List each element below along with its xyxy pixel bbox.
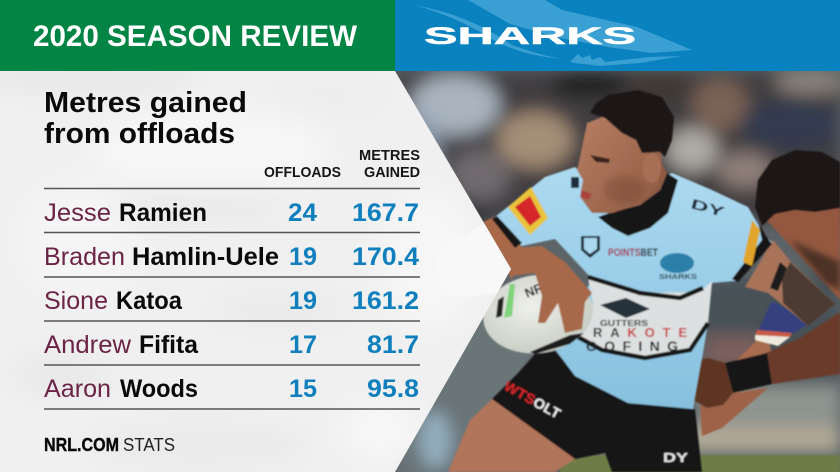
opponent beard <box>790 240 840 290</box>
ball logo <box>530 333 584 354</box>
opponent face <box>766 207 840 300</box>
Sharks player <box>448 90 835 472</box>
row: Jesse Ramien <box>44 199 419 227</box>
title: 2020 SEASON REVIEW <box>33 20 358 53</box>
row: Aaron Woods: 95.8 <box>367 375 419 403</box>
source logo: NRL.COM Stats <box>44 435 175 455</box>
sleeve white cuff <box>755 335 790 346</box>
table: column headers: OFFLOADS <box>264 164 341 181</box>
sleeve ghost <box>437 222 520 297</box>
white torso band <box>578 278 712 359</box>
row: Andrew Fifita <box>44 331 419 359</box>
row: Sione Katoa: Katoa <box>116 287 183 315</box>
row: Braden Hamlin-Uele: Hamlin-Uele <box>132 243 279 271</box>
blurred stadium and ground <box>395 278 840 472</box>
sponsor patch <box>508 187 548 235</box>
table: column headers <box>264 147 420 181</box>
row: Andrew Fifita: Fifita <box>139 331 199 359</box>
jersey text: Rakote: RA KOTE <box>593 325 687 340</box>
row: Sione Katoa: 19 <box>289 287 317 315</box>
black stripe lower <box>578 323 708 358</box>
wrist band <box>725 353 772 393</box>
shorts <box>492 351 702 472</box>
source logo: NRL.COM Stats: NRL.COM <box>44 435 119 455</box>
row: Jesse Ramien: Ramien <box>119 199 207 227</box>
mouth <box>581 190 592 200</box>
opponent sleeve <box>758 301 812 334</box>
ball NRL mark: NRL <box>523 277 553 301</box>
sleeve band <box>492 216 522 248</box>
shorts sponsor: WTSOLT <box>502 378 564 422</box>
blurred crowd <box>395 70 840 233</box>
source logo: NRL.COM Stats: STATS <box>123 435 175 455</box>
player arm <box>745 240 835 326</box>
jersey DY logo: DY <box>689 195 727 220</box>
ball stripe <box>504 284 515 318</box>
brow and eye <box>590 155 610 163</box>
ball dark marks <box>496 296 504 318</box>
row: Aaron Woods: 15 <box>289 375 317 403</box>
panel: stats background <box>0 68 520 472</box>
row: Braden Hamlin-Uele: Braden <box>44 243 125 271</box>
photo: Sharks player carrying the ball <box>395 70 840 472</box>
black stripe upper <box>588 277 703 298</box>
header: blue Sharks bar <box>395 0 840 71</box>
jersey NRL badge <box>581 236 600 258</box>
raised arm skin <box>483 217 522 280</box>
heading: Metres gained <box>44 87 247 119</box>
jersey text: PointsBet: POINTSBET <box>608 247 658 259</box>
thigh <box>448 399 575 472</box>
collar <box>598 173 678 236</box>
shark watermark <box>414 0 692 66</box>
opponent hand <box>694 357 734 408</box>
jersey text: ACE <box>600 298 650 318</box>
row: Braden Hamlin-Uele: 19 <box>289 243 317 271</box>
row: Sione Katoa: Sione <box>44 287 108 315</box>
row: Jesse Ramien: 24 <box>288 199 317 227</box>
jersey club text: SHARKS <box>659 274 697 281</box>
opponent hair <box>755 150 840 226</box>
table: column headers: METRES <box>359 147 420 164</box>
row: Andrew Fifita: 81.7 <box>367 331 419 359</box>
row: Aaron Woods: Aaron <box>44 375 111 403</box>
row: Andrew Fifita: 17 <box>289 331 317 359</box>
ground <box>560 455 840 472</box>
arm tattoo <box>782 262 835 326</box>
ball <box>478 268 598 360</box>
row: Andrew Fifita: Andrew <box>44 331 132 359</box>
jersey collar logo <box>571 177 579 188</box>
row: Jesse Ramien: Jesse <box>44 199 111 227</box>
hair <box>590 90 674 157</box>
jersey shark badge <box>660 253 694 273</box>
Sharks wordmark: SHARKS <box>424 23 636 50</box>
opponent tackling arm <box>766 312 840 384</box>
row: Sione Katoa: 161.2 <box>352 287 419 315</box>
row: Jesse Ramien: 167.7 <box>352 199 419 227</box>
hand <box>498 246 592 333</box>
ear <box>643 153 661 183</box>
opponent lower arm behind <box>700 388 768 436</box>
row: Braden Hamlin-Uele: 170.4 <box>352 243 419 271</box>
row: Sione Katoa <box>44 287 419 315</box>
row: Braden Hamlin-Uele <box>44 243 419 271</box>
heading <box>44 87 247 150</box>
row: Aaron Woods <box>44 375 419 403</box>
cheek shadow <box>605 176 645 204</box>
opponent player <box>678 150 840 436</box>
heading: from offloads <box>44 118 235 150</box>
jersey text: Roofing: OOFING <box>586 338 678 354</box>
jersey <box>495 167 773 409</box>
face <box>577 110 662 213</box>
opponent upper arm <box>736 340 772 362</box>
header: green title bar <box>0 0 396 71</box>
shorts logo: DY <box>663 450 688 465</box>
jersey text: Gutters: GUTTERS <box>600 319 649 328</box>
table: column headers: GAINED <box>364 164 420 181</box>
neck <box>626 162 668 210</box>
sleeve stripe <box>755 330 792 337</box>
sleeve cuff <box>732 222 772 282</box>
row: Aaron Woods: Woods <box>120 375 198 403</box>
sleeve patch <box>743 220 760 266</box>
arm bands <box>770 262 787 291</box>
